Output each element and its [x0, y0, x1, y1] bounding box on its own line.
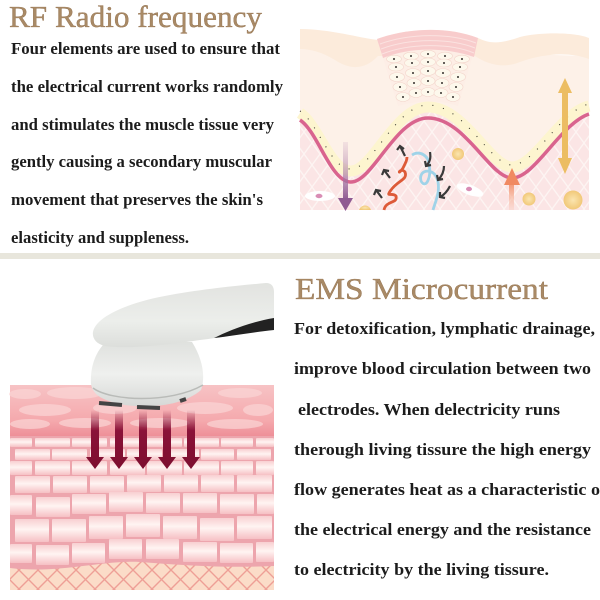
text block: RF description: gently causing a secondary muscular: [11, 152, 272, 171]
fibres: [384, 153, 438, 210]
magnified cell column: [377, 30, 478, 106]
handle: [93, 283, 274, 347]
arrow: orange up: [504, 168, 520, 210]
text block: RF description: Four elements are used to ensure that: [11, 39, 280, 58]
small black arrows: [374, 146, 450, 198]
chrome accent: [214, 318, 274, 338]
text block: EMS description: therough living tissure the high energy: [294, 440, 592, 459]
text block: EMS description: improve blood circulation between two: [294, 359, 591, 378]
text block: EMS description: to electricity by the living tissure.: [294, 560, 549, 579]
top scales: [9, 387, 273, 429]
basement membrane: [300, 114, 589, 182]
head dome: [91, 342, 203, 406]
diagram: skin layers: [9, 283, 274, 590]
text block: EMS description: flow generates heat as a characteristic o: [294, 480, 600, 499]
text block: RF description: the electrical current works randomly: [11, 77, 283, 96]
electrodes: [99, 399, 186, 408]
text block: EMS description: [294, 319, 600, 579]
text block: RF description: and stimulates the muscle tissue very: [11, 115, 274, 134]
corneum lines: [380, 36, 476, 54]
fibroblasts: [305, 191, 335, 201]
pink base: [10, 385, 274, 590]
text block: RF description: movement that preserves the skin's: [11, 190, 263, 209]
stratum corneum magnified: [377, 30, 478, 58]
divider: [0, 253, 600, 259]
lattice dermis: [10, 562, 274, 590]
top epidermis band: [10, 385, 274, 436]
cell nuclei: [393, 53, 463, 98]
text block: RF description: elasticity and suppleness.: [11, 228, 189, 247]
gold spheres: [452, 148, 464, 160]
brick rows: [10, 438, 274, 565]
top skin layer: [300, 29, 589, 67]
arrow: gold double: [558, 78, 572, 174]
metal ring: [93, 385, 203, 398]
text block: EMS description: For detoxification, lymphatic drainage,: [294, 319, 595, 338]
text block: EMS description: the electrical energy and the resistance: [294, 520, 591, 539]
basal cell layer: [300, 106, 589, 171]
dermis background: [300, 112, 589, 210]
text block: RF description: [11, 39, 283, 247]
arrow: purple down: [338, 142, 353, 211]
epidermis layer: [300, 48, 589, 176]
diagram: skin cross-section with RF: [300, 29, 589, 211]
device head: [91, 283, 274, 408]
title: EMS Microcurrent: EMS Microcurrent: [295, 271, 548, 306]
magnified cells: [386, 50, 470, 102]
text block: EMS description: electrodes. When delectricity runs: [298, 400, 560, 419]
title: RF Radio frequency: RF Radio frequency: [9, 0, 263, 34]
arrows: five downward: [86, 410, 200, 469]
